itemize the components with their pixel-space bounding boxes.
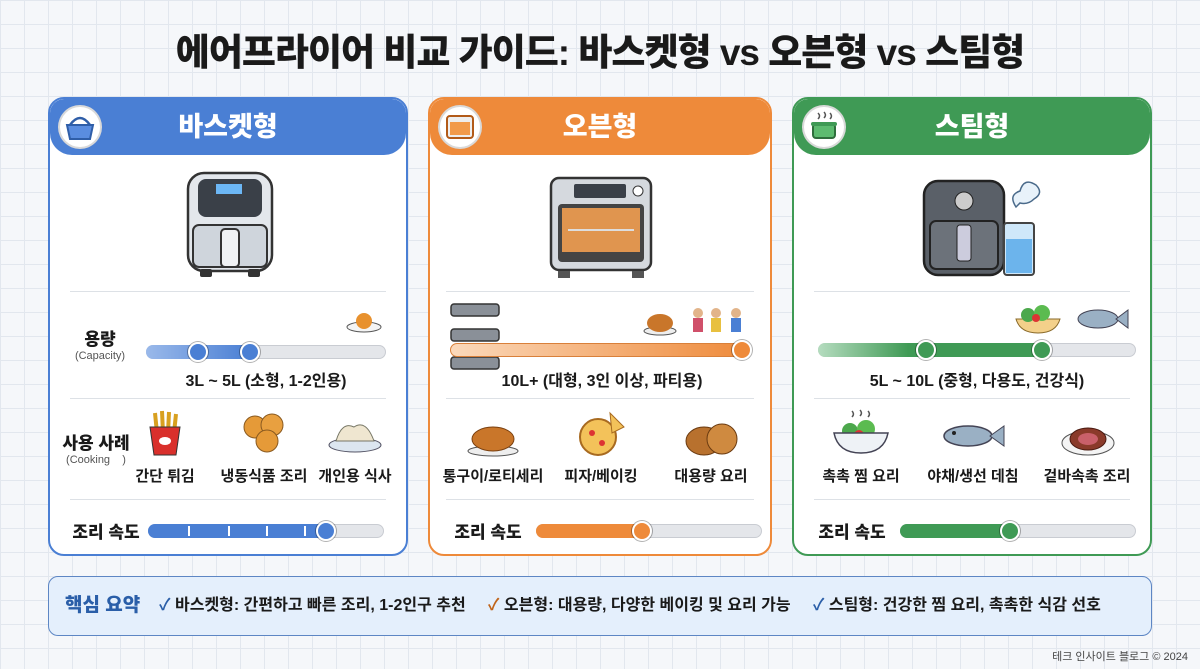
header: steam (794, 99, 1150, 155)
header: basket: 바스켓형 (178, 112, 278, 142)
use case: crispy (1044, 428, 1130, 485)
speed label: 조리 속도 (454, 523, 522, 542)
icon: pot (802, 105, 846, 149)
footer credit: 테크 인사이트 블로그 © 2024 (1052, 651, 1188, 663)
use case label: (Cooking ) (66, 454, 126, 466)
capacity label: 용량 (84, 330, 116, 349)
use case: fries: 간단 튀김 (135, 468, 195, 485)
use case label (62, 434, 130, 466)
use case label: 사용 사례 (62, 434, 130, 453)
icon: turkey and family (644, 308, 741, 336)
use case: large food: 대용량 요리 (674, 468, 748, 485)
speed slider (900, 520, 1136, 542)
use case: rotisserie (443, 426, 543, 485)
panel: oven (428, 97, 772, 556)
icon: trays (450, 303, 500, 370)
use case: pizza (564, 412, 638, 485)
panel: steam (792, 97, 1152, 556)
use case: fries (135, 410, 195, 485)
use case: frozen food (221, 414, 307, 485)
use case: rotisserie: 통구이/로티세리 (443, 468, 543, 485)
use case: fish: 야채/생선 데침 (927, 468, 1019, 485)
use case: large food (674, 424, 748, 485)
use case: frozen food: 냉동식품 조리 (221, 468, 307, 485)
capacity text: 10L+ (대형, 3인 이상, 파티용) (502, 373, 702, 390)
speed label: 조리 속도 (72, 523, 140, 542)
illustration: steam air fryer (922, 180, 1040, 276)
use case: fish (927, 425, 1019, 485)
capacity slider (146, 341, 386, 363)
illustration: oven (550, 176, 652, 278)
capacity label (75, 330, 125, 362)
capacity slider (818, 339, 1136, 361)
icon: salad and fish (1015, 305, 1128, 334)
icon: basket (58, 105, 102, 149)
title: 에어프라이어 비교 가이드: 바스켓형 vs 오븐형 vs 스팀형 (176, 32, 1024, 73)
use case: pizza: 피자/베이킹 (564, 468, 638, 485)
panel: basket (48, 97, 408, 556)
capacity slider (450, 339, 753, 361)
capacity text: 5L ~ 10L (중형, 다용도, 건강식) (870, 373, 1084, 390)
icon: oven (438, 105, 482, 149)
speed slider (148, 520, 384, 542)
use case: crispy: 겉바속촉 조리 (1044, 468, 1130, 485)
illustration: basket air fryer (186, 172, 274, 277)
use case: steamed: 촉촉 찜 요리 (822, 468, 900, 485)
header: basket (50, 99, 406, 155)
summary box (48, 576, 1152, 636)
speed label: 조리 속도 (818, 523, 886, 542)
summary items: ✓ 바스켓형: 간편하고 빠른 조리, 1-2인구 추천 ✓ 오븐형: 대용량, 다양한 베이킹 및 요리 가능 ✓ 스팀형: 건강한 찜 요리, 촉촉한 식감 선호 (159, 597, 1101, 614)
header: oven (430, 99, 770, 155)
use case: dumplings (318, 424, 392, 485)
speed slider (536, 520, 762, 542)
header: oven: 오븐형 (563, 112, 637, 142)
icon: small plate (346, 313, 382, 332)
use case: steamed (822, 410, 900, 485)
capacity label: (Capacity) (75, 350, 125, 362)
capacity text: 3L ~ 5L (소형, 1-2인용) (186, 373, 346, 390)
header: steam: 스팀형 (935, 112, 1009, 142)
use case: dumplings: 개인용 식사 (318, 468, 392, 485)
summary heading: 핵심 요약 (65, 595, 140, 616)
